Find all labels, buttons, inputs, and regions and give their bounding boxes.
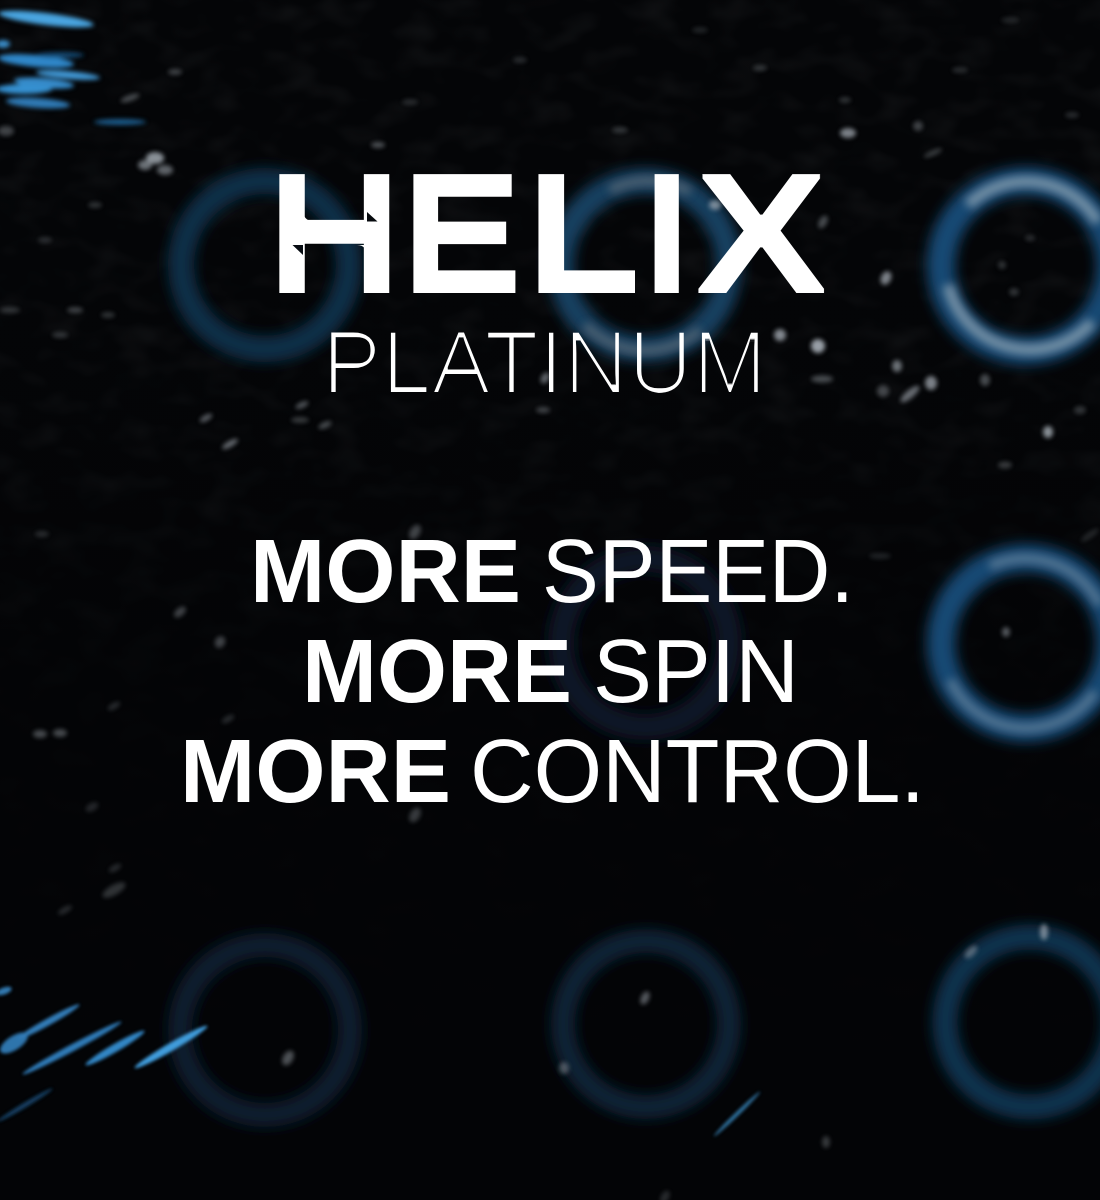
ring: bottom left bbox=[180, 945, 350, 1115]
logo letters: I bbox=[641, 141, 692, 327]
ring: middle centre bbox=[561, 559, 729, 727]
subtitle: PLATINUM: PLATINUM bbox=[322, 312, 767, 412]
logo letters bbox=[266, 140, 827, 327]
light streaks: bottom left bbox=[0, 985, 761, 1138]
logo: HELIX bbox=[266, 140, 827, 327]
ring: bottom centre bbox=[563, 941, 729, 1107]
logo letters: X bbox=[696, 140, 827, 327]
logo letters: H bbox=[266, 140, 403, 326]
logo: H notches bbox=[292, 209, 378, 257]
headline bbox=[180, 522, 925, 822]
line: more spin: SPIN bbox=[593, 622, 799, 722]
line: more speed: SPEED. bbox=[542, 522, 854, 622]
blurred rings bbox=[180, 181, 1100, 1115]
logo letters: L bbox=[525, 141, 642, 327]
line: more spin: MORE bbox=[302, 622, 572, 722]
ring: bottom right bbox=[945, 937, 1100, 1107]
line: more control: CONTROL. bbox=[470, 722, 925, 822]
line: more speed bbox=[250, 522, 854, 622]
ring: top right bbox=[941, 181, 1100, 351]
line: more control: MORE bbox=[180, 722, 451, 822]
logo letters: E bbox=[400, 140, 524, 327]
light streaks: top left bbox=[0, 7, 146, 125]
ring: top left bbox=[181, 181, 349, 349]
line: more spin bbox=[302, 622, 799, 722]
line: more control bbox=[180, 722, 925, 822]
ring: top centre bbox=[561, 181, 729, 350]
line: more speed: MORE bbox=[250, 522, 521, 622]
ring: middle right bbox=[941, 558, 1100, 728]
